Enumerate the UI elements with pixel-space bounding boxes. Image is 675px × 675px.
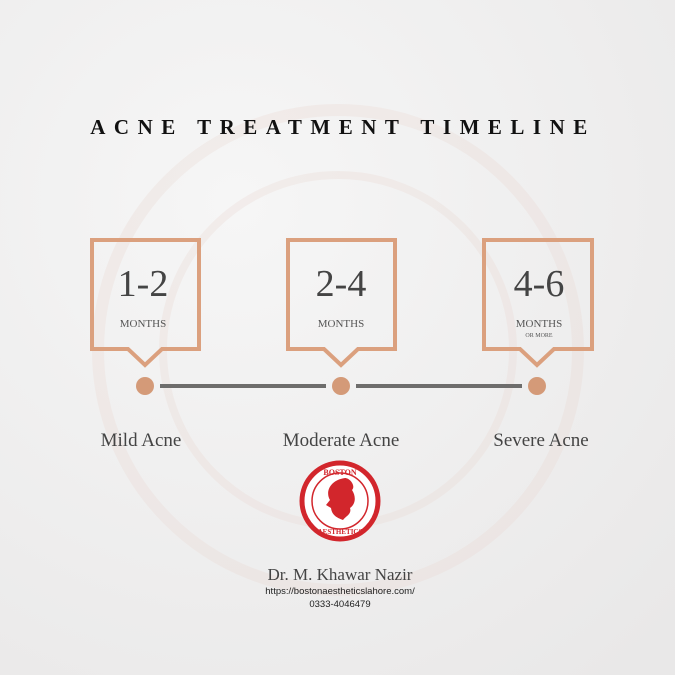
contact text	[265, 565, 415, 610]
stage 1 box	[92, 240, 199, 451]
logo: BOSTON	[323, 468, 357, 477]
stage 1 box: MONTHS	[120, 318, 166, 330]
contact text: https://bostonaestheticslahore.com/	[265, 586, 415, 597]
stage 3 box: MONTHS	[516, 318, 562, 330]
stage 3 box: OR MORE	[525, 333, 553, 339]
stage 2 box: 2-4	[316, 263, 366, 305]
stage 2 box: MONTHS	[318, 318, 364, 330]
title: ACNE TREATMENT TIMELINE	[90, 115, 596, 139]
logo: AESTHETICS	[318, 528, 362, 536]
stage 3 box: 4-6	[514, 263, 564, 305]
stage 1 box: 1-2	[118, 263, 168, 305]
stage 3 box: Severe Acne	[493, 430, 589, 451]
watermark logo	[98, 110, 578, 590]
contact text: 0333-4046479	[309, 599, 371, 610]
timeline line	[160, 384, 522, 388]
logo	[302, 463, 378, 539]
stage 2 box: Moderate Acne	[283, 430, 399, 451]
stage 1 box: Mild Acne	[101, 430, 181, 451]
contact text: Dr. M. Khawar Nazir	[268, 565, 413, 584]
stage 3 box	[484, 240, 592, 451]
stage 2 box	[283, 240, 399, 451]
